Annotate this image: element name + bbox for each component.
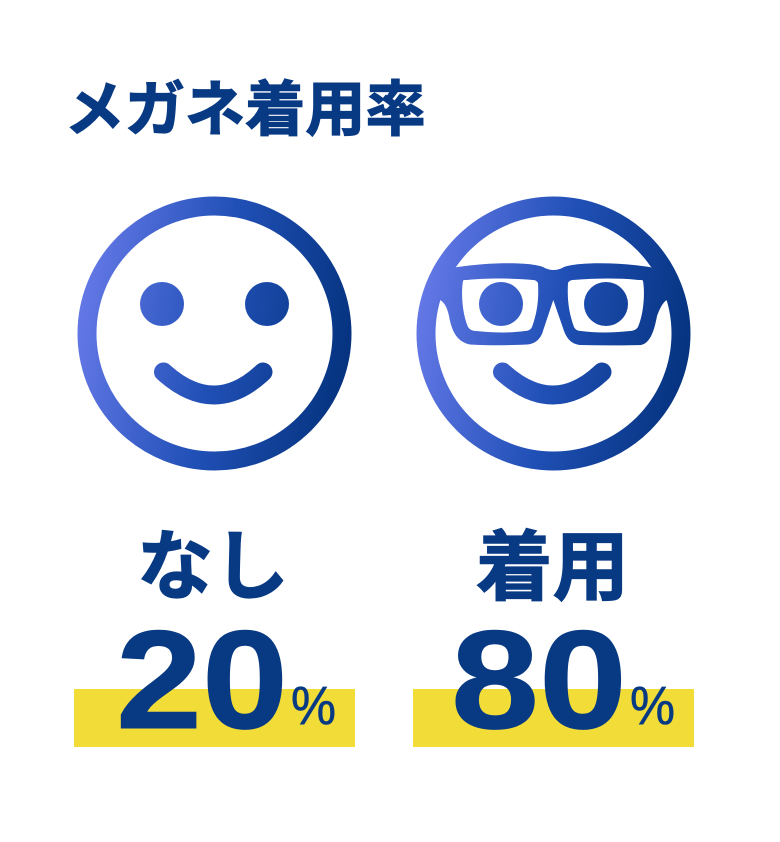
face outline <box>426 206 681 461</box>
right eye <box>584 282 628 326</box>
left eye <box>479 282 523 326</box>
value: 80 percent <box>451 601 675 758</box>
smile <box>164 372 263 395</box>
number 20: 20 <box>116 601 288 758</box>
label: wearing: 着用 <box>476 526 629 611</box>
face outline <box>87 206 342 461</box>
number 80: 80 <box>451 601 627 758</box>
value: 20 percent <box>116 601 336 758</box>
title: メガネ着用率 <box>64 76 426 144</box>
left eye <box>140 282 184 326</box>
highlight bar: wearing <box>413 689 694 747</box>
percent sign: % <box>630 676 675 736</box>
smile <box>502 372 602 395</box>
label: none: なし <box>137 525 289 610</box>
highlight bar: none <box>74 689 355 747</box>
icon: smiley face without glasses <box>87 206 342 461</box>
icon: smiley face with glasses <box>426 206 681 461</box>
glasses <box>436 263 670 345</box>
percent sign: % <box>291 676 336 736</box>
right eye <box>245 282 289 326</box>
